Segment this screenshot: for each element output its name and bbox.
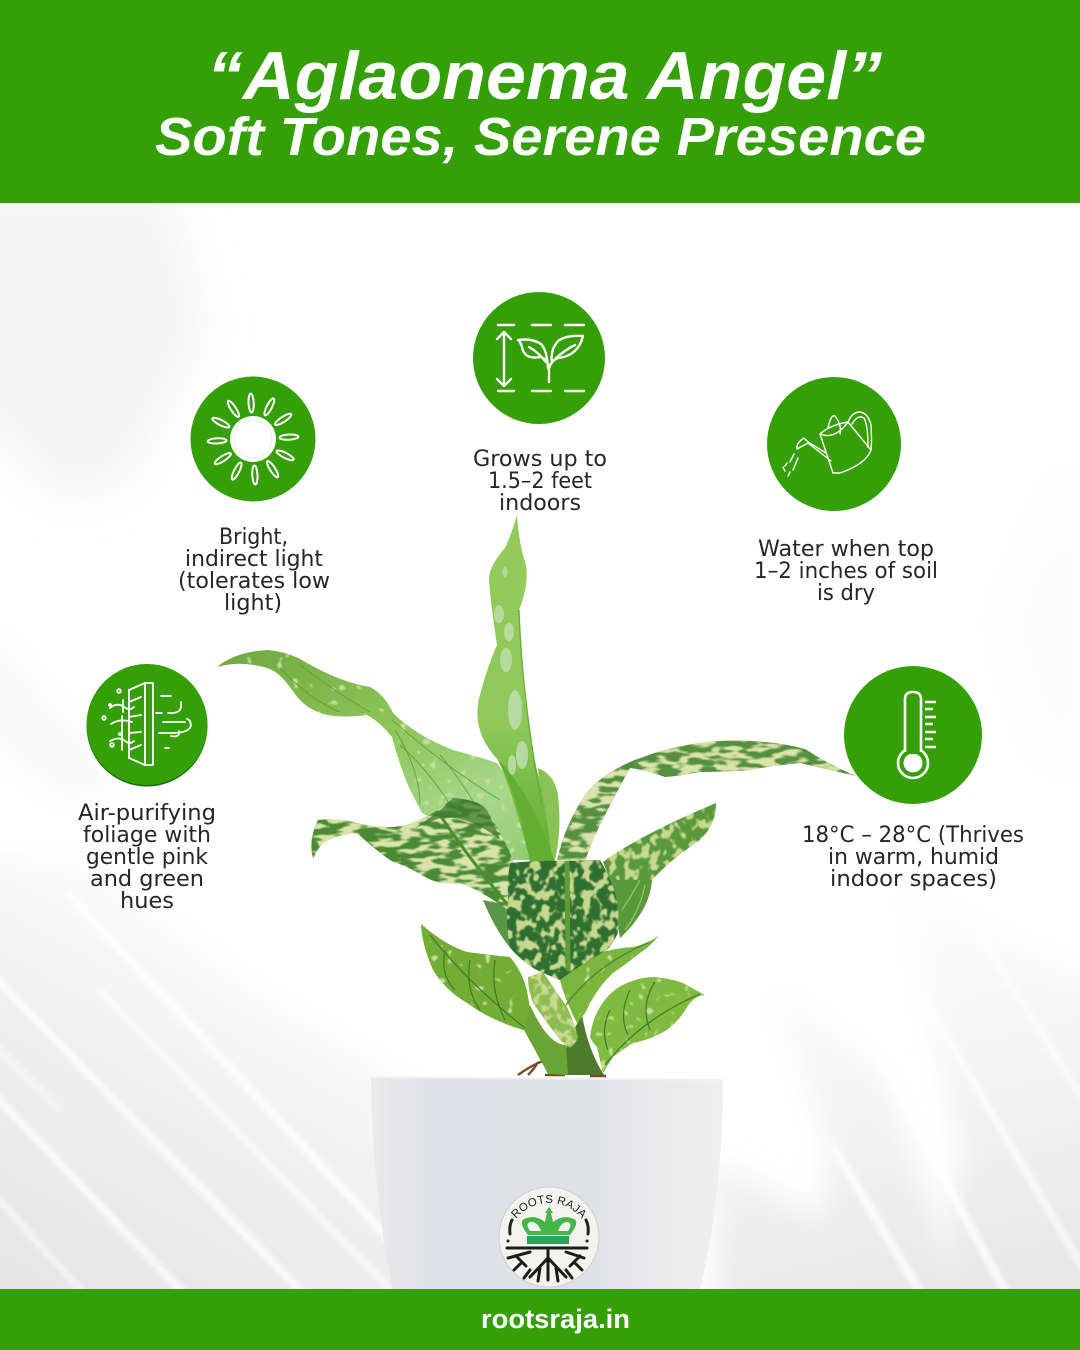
- text: light: light): [224, 591, 282, 616]
- text: light: Bright,: [219, 525, 288, 550]
- logo badge: [498, 1186, 600, 1288]
- text: height: [473, 447, 607, 516]
- leaf: back right sliver: [538, 768, 559, 860]
- text: air purifying: hues: [120, 889, 174, 914]
- leaf: small pale inner: [528, 972, 578, 1048]
- text: air purifying: [78, 801, 216, 914]
- footer url: rootsraja.in: [481, 1304, 630, 1334]
- leaf: mid right variegated: [603, 803, 716, 938]
- leaf: back dark behind centre: [483, 900, 512, 950]
- title: “Aglaonema Angel”: [207, 38, 882, 114]
- text: temperature: [802, 823, 1024, 892]
- stem: [560, 1015, 604, 1075]
- leaf: tall centre: [477, 515, 555, 862]
- feature: air purifying: [78, 664, 216, 914]
- text: water: Water when top: [758, 537, 934, 562]
- leaf: big pale left: [217, 650, 553, 860]
- text: air purifying: and green: [90, 867, 204, 892]
- text: light: (tolerates low: [178, 569, 330, 594]
- icon: air filter: [86, 664, 208, 786]
- feature: water: [754, 377, 938, 606]
- leaf: lower left: [421, 924, 531, 1030]
- logo crown: [522, 1207, 576, 1244]
- feature: height: [473, 292, 607, 516]
- text: air purifying: gentle pink: [86, 845, 208, 870]
- leaf: lower middle: [560, 935, 659, 1023]
- pot: [371, 1076, 723, 1289]
- feature: temperature: [802, 666, 1024, 892]
- text: air purifying: foliage with: [83, 823, 211, 848]
- leaf: upper right variegated: [557, 741, 856, 862]
- text: water: [754, 537, 938, 606]
- leaf: sheath at base: [524, 1005, 568, 1075]
- icon: watering can: [767, 377, 901, 511]
- logo roots: [507, 1248, 587, 1281]
- logo wordmark: ROOTS RAJA: [511, 1195, 586, 1219]
- icon: thermometer: [844, 666, 982, 804]
- text: light: [178, 525, 330, 616]
- leaf: lower right: [590, 977, 705, 1073]
- header band: [0, 0, 1080, 203]
- text: height: indoors: [499, 491, 581, 516]
- icon: sun: [190, 376, 316, 502]
- icon: plant height: [473, 292, 605, 424]
- text: temperature: in warm, humid: [828, 845, 999, 870]
- text: air purifying: Air-purifying: [78, 801, 216, 826]
- text: water: is dry: [817, 581, 875, 606]
- text: light: indirect light: [185, 547, 323, 572]
- title: [155, 38, 926, 167]
- title: Soft Tones, Serene Presence: [155, 107, 926, 167]
- leaf: centre dark variegated: [507, 860, 619, 980]
- text: water: 1–2 inches of soil: [754, 559, 938, 584]
- text: height: 1.5–2 feet: [488, 469, 592, 494]
- plant: [217, 515, 856, 1076]
- footer band: [0, 1289, 1080, 1350]
- text: height: Grows up to: [473, 447, 607, 472]
- leaf: left variegated: [311, 798, 513, 910]
- roots: [518, 1060, 606, 1076]
- feature: light: [178, 376, 330, 616]
- text: temperature: indoor spaces): [830, 867, 997, 892]
- text: temperature: 18°C – 28°C (Thrives: [802, 823, 1024, 848]
- logo side arcs: [508, 1220, 588, 1241]
